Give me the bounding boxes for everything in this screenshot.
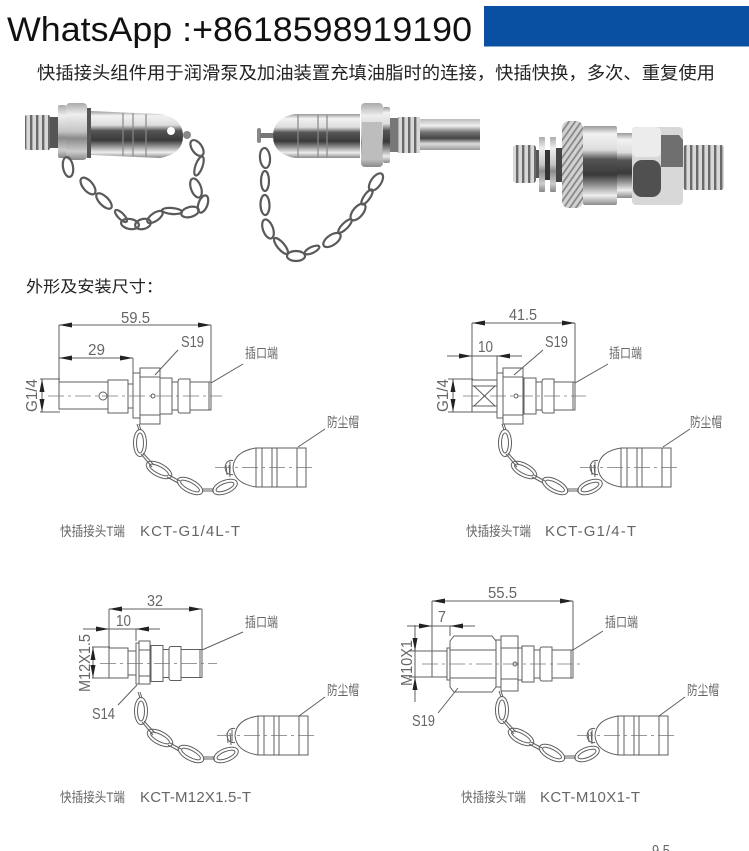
caption: 快插接头T端: [466, 523, 531, 539]
chain: [498, 424, 604, 498]
chain: [134, 424, 239, 498]
dimension 7: 7: [438, 609, 446, 626]
intro text: 快插接头组件用于润滑泵及加油装置充填油脂时的连接，快插快换，多次、重复使用: [37, 63, 715, 83]
chain: [134, 692, 240, 766]
connector body: [100, 641, 217, 684]
blue header band: [484, 6, 749, 46]
leaders: [514, 350, 690, 447]
connector body: [422, 636, 581, 692]
caption: 快插接头T端: [461, 789, 526, 805]
dimension 41.5: 41.5: [509, 307, 537, 324]
dimension 29: 29: [88, 342, 105, 359]
connector body: [48, 368, 222, 424]
diagram: KCT-M12X1.5-T: [60, 593, 359, 806]
arrows: [90, 606, 202, 678]
model number: KCT-G1/4L-T: [140, 523, 240, 540]
dimension lines: [40, 325, 211, 412]
diagram: KCT-G1/4L-T: [24, 310, 359, 540]
dimension M12X1.5: M12X1.5: [77, 634, 94, 692]
label: socket end: 插口端: [245, 346, 278, 361]
diagram: KCT-G1/4-T: [435, 307, 722, 540]
label: dust cap: 防尘帽: [690, 415, 722, 430]
caption: 快插接头T端: [60, 523, 125, 539]
connector body: [463, 368, 586, 424]
diagram: KCT-M10X1-T: [399, 585, 719, 806]
dimension lines: [83, 609, 202, 678]
model number: KCT-G1/4-T: [545, 523, 636, 540]
dimension S19: S19: [412, 713, 435, 730]
dimension 10: 10: [116, 613, 131, 630]
dust cap: [580, 448, 681, 487]
label: socket end: 插口端: [609, 346, 642, 361]
dimension 32: 32: [147, 593, 163, 610]
title: WhatsApp contact: WhatsApp :+8618598919190: [7, 11, 472, 49]
photo: quick coupler: [513, 121, 724, 208]
dimension 55.5: 55.5: [488, 585, 517, 602]
leaders: [155, 350, 325, 447]
photo: connector with cap and chain 1: [25, 103, 210, 231]
dimension G1/4: G1/4: [24, 379, 41, 412]
label: socket end: 插口端: [245, 615, 278, 630]
label: dust cap: 防尘帽: [327, 415, 359, 430]
arrows: [450, 320, 575, 412]
dimension S14: S14: [92, 706, 115, 723]
dimension M10X1: M10X1: [399, 640, 416, 686]
dimension lines: [407, 601, 573, 702]
leaders: [438, 631, 685, 716]
dimension lines: [447, 323, 575, 412]
caption: 快插接头T端: [60, 789, 125, 805]
label: dust cap: 防尘帽: [327, 683, 359, 698]
dust cap: [215, 448, 316, 487]
dust cap: [577, 716, 678, 755]
photo: connector with cap and chain 2: [257, 103, 480, 261]
label: socket end: 插口端: [605, 615, 638, 630]
heading: dimensions: 外形及安装尺寸：: [26, 278, 163, 296]
dust cap: [217, 716, 318, 755]
dimension 10: 10: [478, 339, 493, 356]
model number: KCT-M12X1.5-T: [140, 789, 251, 806]
leaders: [118, 632, 325, 716]
arrows: [412, 598, 573, 690]
model number: KCT-M10X1-T: [540, 789, 640, 806]
dimension S19: S19: [181, 334, 204, 351]
arrows: [40, 322, 211, 412]
label: dust cap: 防尘帽: [687, 683, 719, 698]
chain: [496, 691, 601, 765]
dimension S19: S19: [545, 334, 568, 351]
dimension 59.5: 59.5: [121, 310, 150, 327]
dimension G1/4: G1/4: [435, 379, 452, 412]
